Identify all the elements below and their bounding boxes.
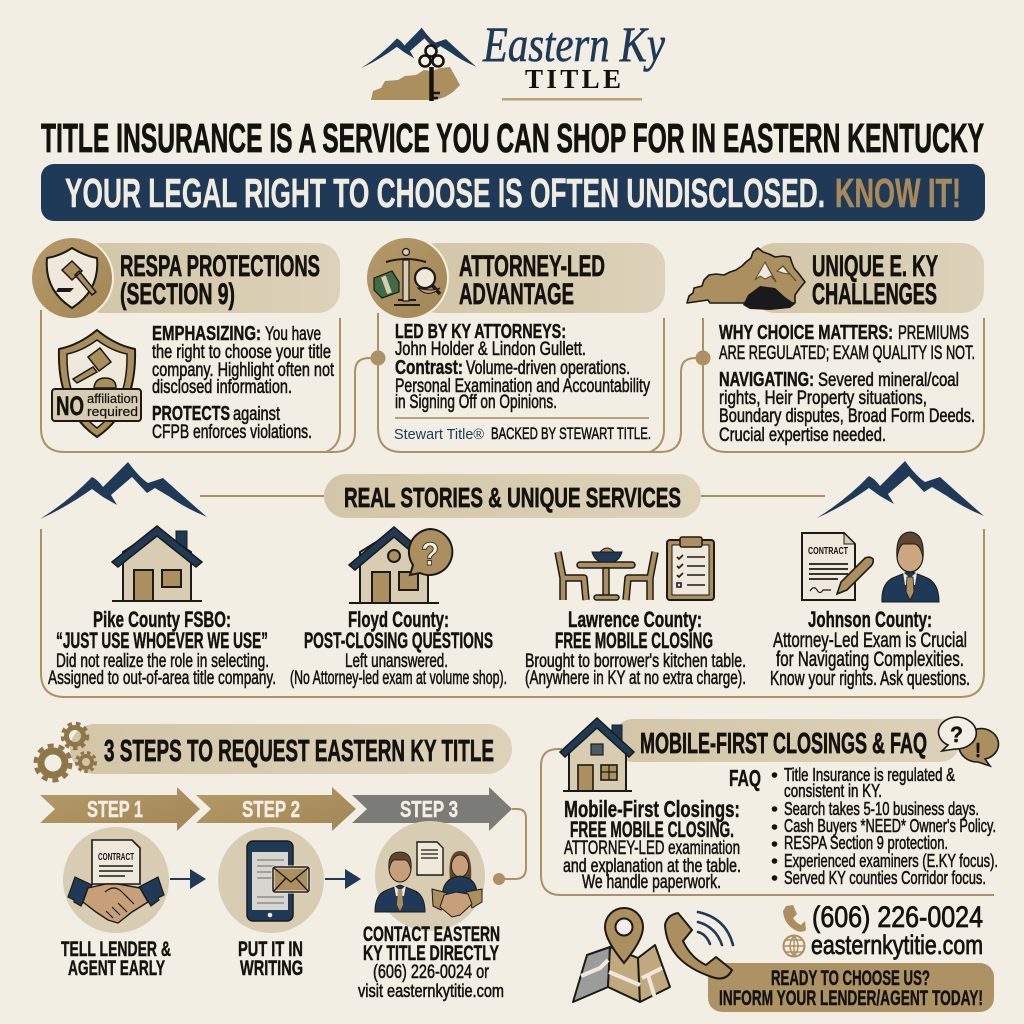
panel: RESPA protections xyxy=(30,236,386,452)
story text: (No Attorney-led exam at volume shop). xyxy=(290,668,507,689)
step 3 caption: CONTACT EASTERN xyxy=(363,923,500,946)
heading text: CHALLENGES xyxy=(812,278,937,311)
body text: Crucial expertise needed. xyxy=(719,425,886,446)
step 3 caption: (606) 226-0024 or xyxy=(373,962,490,983)
heading text xyxy=(812,250,938,311)
panel: unique E. KY challenges xyxy=(687,243,984,452)
FAQ list xyxy=(729,764,998,888)
step 1 caption: AGENT EARLY xyxy=(68,957,165,980)
Stewart Title backing: BACKED BY STEWART TITLE. xyxy=(491,424,651,443)
icon: gears xyxy=(36,724,96,780)
story text: Johnson County: xyxy=(808,607,932,632)
step 2 caption xyxy=(238,938,303,980)
story text xyxy=(48,607,276,689)
body text xyxy=(395,321,650,413)
mobile-first text: We handle paperwork. xyxy=(582,872,721,893)
story text: “JUST USE WHOEVER WE USE” xyxy=(56,628,268,653)
icon: contract and pen xyxy=(802,533,873,600)
Stewart Title backing xyxy=(394,424,651,443)
icon: Kentucky with mountains and coal xyxy=(687,248,805,310)
heading text xyxy=(120,250,320,311)
icon: kitchen table and chairs xyxy=(558,548,655,600)
FAQ list: Title Insurance is regulated & xyxy=(784,764,955,785)
section heading xyxy=(324,474,701,518)
story text: Brought to borrower's kitchen table. xyxy=(525,651,746,672)
heading pill xyxy=(613,719,960,762)
icon: speech bubbles xyxy=(938,717,998,766)
heading pill xyxy=(415,243,665,313)
body text: John Holder & Lindon Gullett. xyxy=(395,339,586,360)
icon: house xyxy=(112,526,202,601)
logo subtitle: TITLE xyxy=(525,64,621,94)
icon: shield with gavel badge xyxy=(30,236,114,320)
icon: mountains left xyxy=(40,462,207,519)
step 2 arrow: STEP 2 xyxy=(242,796,300,822)
step 3 arrow xyxy=(352,787,512,831)
icon: scales, money and magnifier xyxy=(365,236,449,320)
section: real stories xyxy=(40,461,984,697)
body text: LED BY KY ATTORNEYS: xyxy=(395,321,566,343)
logo Kentucky map xyxy=(371,67,460,100)
icon: house with question bubble xyxy=(349,527,452,603)
step 3 caption: visit easternkytitie.com xyxy=(358,981,504,1001)
phone number: (606) 226-0024 xyxy=(812,901,983,934)
icon: telephone xyxy=(698,912,733,945)
section: 3 steps xyxy=(36,724,526,1001)
story text: Did not realize the role in selecting. xyxy=(56,651,269,672)
banner: KNOW IT! xyxy=(835,170,961,216)
icon: no affiliation shield: affiliation xyxy=(87,391,138,406)
step arrow xyxy=(170,869,206,889)
heading text: ATTORNEY-LED xyxy=(459,250,605,283)
body text: Severed mineral/coal xyxy=(818,370,959,391)
mobile-first text: Mobile-First Closings: xyxy=(564,796,740,822)
body text: EMPHASIZING: xyxy=(152,323,261,345)
connector to mobile panel xyxy=(499,809,526,879)
body text: against xyxy=(233,404,281,425)
body text: PROTECTS xyxy=(152,403,230,425)
step 3 caption xyxy=(358,923,504,1001)
body text: CFPB enforces violations. xyxy=(152,422,312,443)
icon: map with pin xyxy=(573,908,670,1002)
body text: Contrast: xyxy=(395,357,463,379)
section frame xyxy=(41,496,984,697)
body text xyxy=(719,322,975,446)
body text: You have xyxy=(265,324,321,345)
section heading: 3 STEPS TO REQUEST EASTERN KY TITLE xyxy=(104,733,494,768)
logo xyxy=(361,16,666,101)
mobile-first text xyxy=(563,796,741,893)
panel frame xyxy=(703,318,984,452)
panel frame and connector xyxy=(41,310,378,452)
step 2 icon: phone and envelope xyxy=(218,827,324,933)
story: Pike County xyxy=(48,526,276,689)
icon: no affiliation shield: NO xyxy=(56,391,84,421)
icon: contract and pen: CONTRACT xyxy=(808,546,848,557)
panel: attorney-led advantage xyxy=(365,236,710,452)
heading text xyxy=(459,250,605,311)
body text: PREMIUMS xyxy=(898,323,969,344)
story text: Left unanswered. xyxy=(345,651,448,672)
connector dot xyxy=(493,873,505,885)
website: easternkytitie.com xyxy=(811,930,983,960)
section heading xyxy=(70,724,512,774)
heading text: (SECTION 9) xyxy=(120,278,235,311)
step 3 icon: attorneys shaking hands xyxy=(375,821,485,931)
story text: Floyd County: xyxy=(348,607,449,632)
body text: in Signing Off on Opinions. xyxy=(395,392,557,413)
panel frame xyxy=(541,749,994,895)
icon: mountains right xyxy=(817,461,984,518)
body text: NAVIGATING: xyxy=(719,369,814,391)
icon: no affiliation shield: required xyxy=(87,404,138,419)
step 3 arrow: STEP 3 xyxy=(400,796,458,822)
icon: house xyxy=(560,718,634,791)
section heading: REAL STORIES & UNIQUE SERVICES xyxy=(344,482,681,513)
icon: no affiliation shield xyxy=(52,330,141,437)
icon: attorney xyxy=(882,532,939,602)
story text xyxy=(290,607,507,689)
body text: rights, Heir Property situations, xyxy=(719,388,927,409)
step 1 caption xyxy=(61,938,171,980)
step 3 caption: KY TITLE DIRECTLY xyxy=(363,942,499,965)
story: Johnson County xyxy=(770,532,970,690)
step 1 icon: handshake and contract: CONTRACT xyxy=(98,852,134,863)
FAQ list: RESPA Section 9 protection. xyxy=(784,832,948,853)
step 1 arrow xyxy=(40,787,200,831)
icon: house with question bubble: ? xyxy=(421,536,439,572)
heading text: UNIQUE E. KY xyxy=(812,250,938,283)
story text xyxy=(770,607,970,690)
icon: speech bubbles: ! xyxy=(975,740,981,762)
story text: Pike County FSBO: xyxy=(93,607,231,632)
body text: Personal Examination and Accountability xyxy=(395,376,650,397)
heading text: RESPA PROTECTIONS xyxy=(120,250,320,283)
step 1 arrow: STEP 1 xyxy=(87,796,143,822)
mobile-first text: ATTORNEY-LED examination xyxy=(564,838,740,859)
logo mountains xyxy=(361,28,476,68)
icon: telephone handset xyxy=(665,913,732,978)
body text xyxy=(152,323,335,443)
step 2 arrow xyxy=(196,787,356,831)
story text: (Anywhere in KY at no extra charge). xyxy=(525,668,746,689)
story text: Lawrence County: xyxy=(568,607,702,632)
body text: the right to choose your title xyxy=(152,342,331,363)
call to action: READY TO CHOOSE US? xyxy=(771,967,930,990)
story text: POST-CLOSING QUESTIONS xyxy=(304,628,493,653)
panel: mobile-first closings and FAQ xyxy=(541,717,998,895)
story: Floyd County xyxy=(290,527,507,689)
story text xyxy=(525,607,746,689)
icon: clipboard checklist xyxy=(667,537,714,600)
body text: Volume-driven operations. xyxy=(466,358,630,379)
call to action xyxy=(708,963,994,1012)
logo key xyxy=(420,46,444,101)
body text: disclosed information. xyxy=(152,377,292,398)
logo wordmark: Eastern Ky xyxy=(482,16,666,72)
step 2 caption: PUT IT IN xyxy=(238,938,303,961)
FAQ list: consistent in KY. xyxy=(784,780,882,801)
body text: WHY CHOICE MATTERS: xyxy=(719,322,893,344)
story text: Assigned to out-of-area title company. xyxy=(48,668,276,689)
step 1 caption: TELL LENDER & xyxy=(61,938,171,961)
step 2 caption: WRITING xyxy=(240,957,303,980)
body text: company. Highlight often not xyxy=(152,360,335,381)
contact and call to action xyxy=(573,901,994,1012)
step 1 icon: handshake and contract xyxy=(63,827,169,933)
heading pill xyxy=(753,243,984,313)
panel frame and connector xyxy=(378,313,703,452)
story text: FREE MOBILE CLOSING xyxy=(555,628,713,653)
icon: speech bubbles: ? xyxy=(950,722,963,747)
FAQ list: FAQ xyxy=(729,765,761,791)
Stewart Title backing: Stewart Title® xyxy=(394,426,484,443)
heading pill xyxy=(80,243,340,313)
story: Lawrence County xyxy=(525,537,746,689)
mobile-first text: FREE MOBILE CLOSING. xyxy=(570,817,734,842)
step arrow xyxy=(325,869,361,889)
mobile-first text: and explanation at the table. xyxy=(563,856,741,877)
heading text: ADVANTAGE xyxy=(459,278,574,311)
